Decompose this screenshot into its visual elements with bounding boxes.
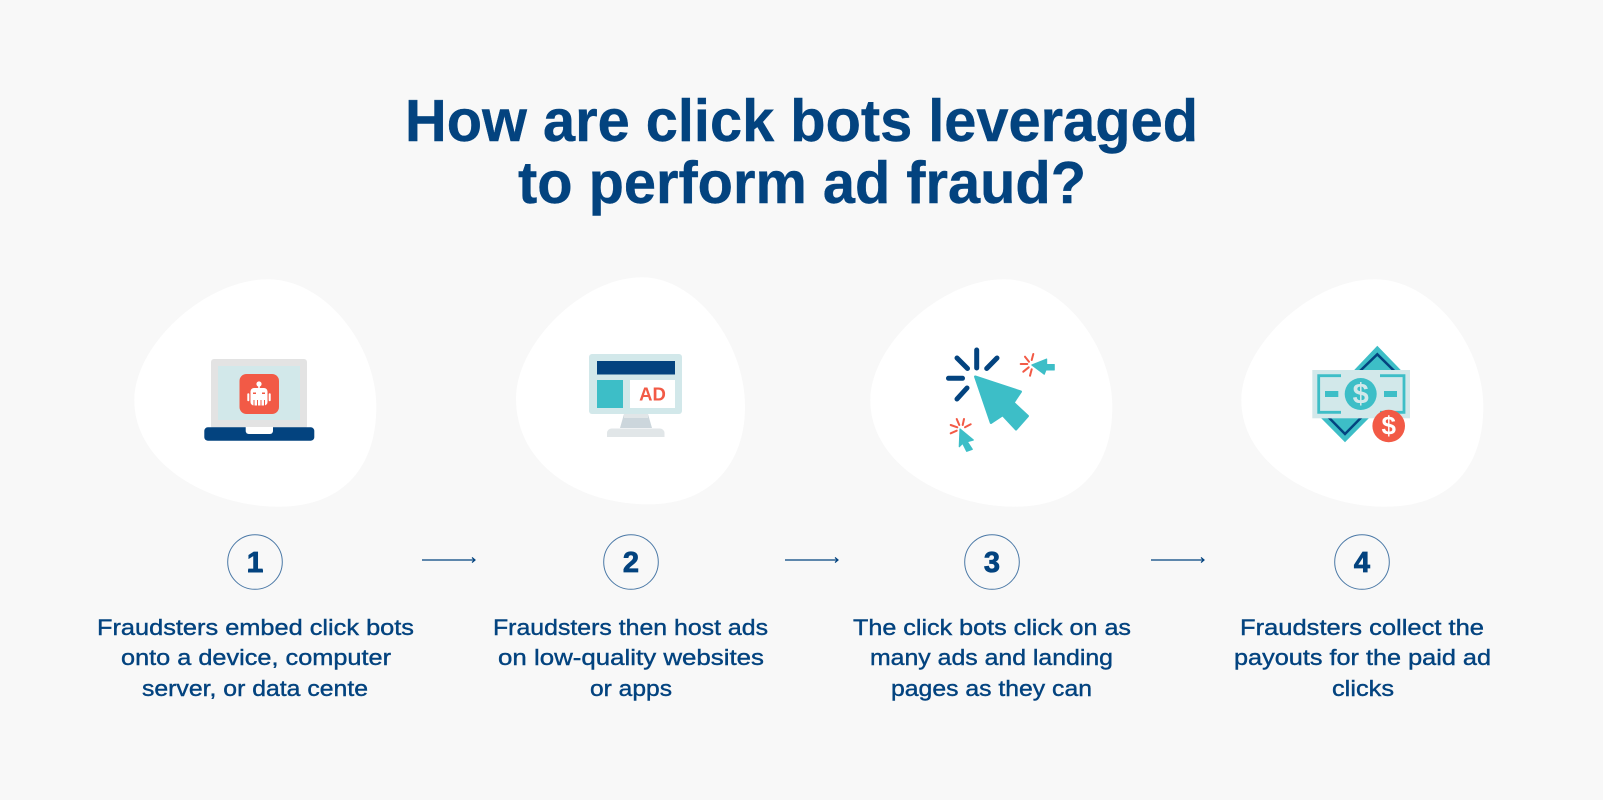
blob: step 3 background xyxy=(870,279,1112,507)
title: How are click bots leveraged xyxy=(405,88,1198,154)
text: step 2 description: on low-quality websites xyxy=(498,645,764,670)
icon: banknote and coin: $ xyxy=(1353,379,1369,411)
panel: step 3 xyxy=(853,279,1131,701)
title xyxy=(405,88,1198,216)
number badge 2 xyxy=(604,535,658,589)
text: step 4 description: clicks xyxy=(1332,676,1394,701)
text: step 3 description: pages as they can xyxy=(891,676,1092,701)
icon: laptop with robot xyxy=(204,359,314,441)
number badge 1 xyxy=(228,535,282,589)
number badge 4 xyxy=(1335,535,1389,589)
icon: banknote and coin: $ xyxy=(1381,411,1396,441)
text: step 2 description xyxy=(493,615,768,701)
text: step 3 description: The click bots click on as xyxy=(853,615,1131,640)
text: step 1 description: onto a device, computer xyxy=(121,645,392,670)
text: step 1 description: Fraudsters embed click bots xyxy=(97,615,414,640)
number badge 4: 4 xyxy=(1354,547,1370,579)
blob: step 2 background xyxy=(516,277,745,504)
icon: monitor with ad: AD xyxy=(639,384,666,405)
icon: monitor with ad xyxy=(589,354,682,437)
text: step 4 description xyxy=(1234,615,1491,701)
blob: step 4 background xyxy=(1241,279,1483,507)
number badge 2: 2 xyxy=(623,547,639,579)
icon: banknote and coin xyxy=(1312,346,1410,442)
number badge 1: 1 xyxy=(247,547,263,579)
number badge 3 xyxy=(965,535,1019,589)
arrow: step 2 to 3 xyxy=(785,558,838,562)
title: to perform ad fraud? xyxy=(518,150,1086,216)
panel: step 1 xyxy=(97,279,414,701)
text: step 4 description: payouts for the paid ad xyxy=(1234,645,1491,670)
text: step 1 description xyxy=(97,615,414,701)
text: step 2 description: or apps xyxy=(590,676,672,701)
icon: clicking cursors xyxy=(948,350,1054,451)
number badge 3: 3 xyxy=(984,547,1000,579)
text: step 3 description: many ads and landing xyxy=(870,645,1113,670)
panel: step 4 xyxy=(1234,279,1491,701)
blob: step 1 background xyxy=(134,279,376,507)
arrow: step 1 to 2 xyxy=(422,558,475,562)
text: step 4 description: Fraudsters collect the xyxy=(1240,615,1484,640)
text: step 2 description: Fraudsters then host ads xyxy=(493,615,768,640)
arrow: step 3 to 4 xyxy=(1151,558,1204,562)
text: step 1 description: server, or data cente xyxy=(142,676,368,701)
panel: step 2 xyxy=(493,277,768,701)
text: step 3 description xyxy=(853,615,1131,701)
